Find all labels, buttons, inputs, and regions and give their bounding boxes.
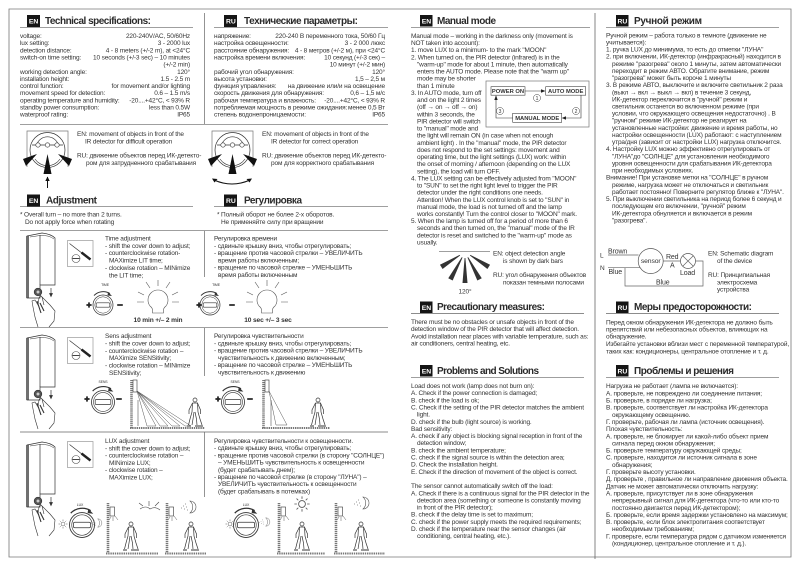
text: time adjustment EN: MAXimize LIT time; (109, 258, 163, 265)
spec values RU: 3 - 2 000 люкс (345, 40, 386, 47)
knob: lux RU (226, 503, 270, 538)
text: problems and solutions: C. Check if the setting of the PIR detector matches the ambient (411, 404, 584, 411)
heading: technical parameters: Технические параметры: (244, 16, 358, 27)
knob: lux EN: LUX (77, 503, 84, 507)
heading: adjustment RU: RU (226, 198, 236, 205)
circuit diagram: Blue (656, 280, 670, 286)
text: manual mode instructions: the onset of morning / afternoon (depending on the LUX (417, 161, 571, 168)
text: time adjustment RU: время работы включенным; (218, 256, 299, 264)
badge: RU (224, 15, 237, 27)
text: manual mode instructions: 5. When the lamp is turned off for a period of more than 6 (411, 218, 568, 225)
text: problems RU: С. проверьте, находится ли источник сигнала в зоне (606, 455, 757, 462)
text: manual mode instructions: 3. In AUTO mode, turn off (411, 90, 482, 97)
text: manual mode instructions: 4. The LUX setting can be effectively adjusted from "MOON" (411, 175, 577, 182)
text: precautions RU: Избегайте установки вблизи мест с переменной температурой, (606, 340, 789, 348)
text: manual mode instructions: NOT taken into account): (411, 40, 480, 47)
heading: adjustment RU (224, 194, 302, 206)
heading: problems and solutions: Problems and Solutions (437, 366, 539, 377)
text: manual mode instructions: seconds and then turned on, the "manual" mode of the IR (417, 225, 575, 232)
spec labels RU: напряжение: (214, 33, 251, 40)
text: manual mode instructions: Manual mode – working in the darkness only (movement is (411, 33, 574, 40)
text: problems RU: окружающему освещению. (612, 412, 691, 419)
text: precautionary measures: air conditioners, central heating, etc. (411, 341, 510, 348)
spec labels RU: высота установки: (214, 76, 267, 83)
caption: detection angle: is shown by dark bars (503, 258, 564, 265)
text: precautionary measures: Avoid installation near places with variable temperature, such as: (411, 333, 589, 340)
caption: correct operation: ром для корректного срабатывания (271, 159, 375, 167)
text: sens adjustment EN: SENSitivity; (109, 370, 142, 377)
knob: lux RU: LUX (243, 503, 250, 507)
text: manual mode RU: учитывается): (606, 39, 646, 46)
spec labels EN: installation height: (20, 76, 70, 83)
text: manual mode instructions: setting), the load will turn OFF. (417, 168, 500, 175)
text: manual mode RU: "разогрева". (612, 217, 647, 224)
panel: technical specifications EN (19, 15, 193, 119)
heading: adjustment RU: Регулировка (244, 196, 302, 206)
text: manual mode instructions: mode may be shorter (417, 76, 477, 83)
text: sens adjustment RU: Регулировка чувствительности (214, 333, 304, 340)
caption: schematic diagram: электросхема (717, 279, 758, 286)
spec labels RU: настройка времени включения: (214, 53, 305, 61)
text: time adjustment RU: Регулировка времени (214, 236, 277, 242)
text: sens adjustment RU: - вращение по часовой стрелке – УМЕНЬШИТЬ (214, 361, 352, 369)
text: lux adjustment EN: LUX adjustment (105, 438, 150, 445)
spec labels EN: voltage: (20, 33, 42, 40)
note RU: * Полный оборот не более 2-х оборотов. (217, 210, 334, 218)
text: problems RU: А. проверьте, не повреждено ли соединение питания; (606, 390, 762, 397)
text: problems and solutions: A. Check if there is a continuous signal for the PIR detector in the (411, 490, 590, 497)
flow diagram: power on, auto, manual: POWER ON (492, 89, 524, 95)
icon: screwdriver, lux (68, 442, 93, 468)
caption: schematic diagram: RU: Принципиальная (708, 272, 771, 279)
text: manual mode RU: 4. Настройку LUX можно эффективно отрегулировать от (606, 145, 770, 153)
flow diagram: power on, auto, manual: 3 (499, 109, 502, 115)
heading: technical specifications: Technical specifications: (45, 16, 151, 27)
text: precautionary measures: detection window of the PIR detector that will affect detection. (411, 326, 579, 333)
icon: PIR correct operation (208, 131, 257, 184)
badge: EN: EN (29, 19, 38, 26)
circuit diagram: Load (680, 270, 695, 277)
icon: detection angle bars: 120° (459, 288, 472, 296)
text: problems RU: В. проверьте, если блок электропитания соответствует (606, 518, 765, 526)
text: problems RU: Г. проверьте, рабочая ли лампа (источник освещения). (606, 418, 765, 426)
text: lux adjustment RU: УВЕЛИЧИТЬ чувствительность к освещенности (218, 481, 357, 488)
spec labels EN: working detection angle: (19, 69, 87, 76)
heading: precautionary measures: EN (422, 305, 431, 312)
text: problems and solutions: D. check if the bulb (light source) is working. (411, 419, 532, 426)
badge: RU (616, 15, 628, 26)
heading: precautions RU: Меры предосторожности: (634, 302, 752, 313)
panel: problems and solutions (411, 365, 590, 540)
badge: EN: EN (422, 18, 431, 25)
note RU: Не применяйте силу при вращении (221, 218, 324, 226)
text: time adjustment RU: - сдвиньте крышку вниз, чтобы отрегулировать; (214, 242, 351, 250)
text: manual mode instructions: than 1 minute (417, 83, 455, 90)
text: manual mode instructions: ambient light) . In the "manual" mode, the PIR detector (417, 140, 567, 147)
heading: precautions RU: RU (618, 305, 627, 312)
heading: adjustment EN: EN (29, 198, 38, 205)
text: problems and solutions: detection window; (417, 440, 467, 447)
text: lux adjustment RU: Регулировка чувствительности к освещенности. (214, 438, 353, 445)
text: problems RU: Нагрузка не работает (лампа не включается): (606, 382, 738, 390)
badge: EN (27, 15, 40, 27)
flow diagram: power on, auto, manual (486, 81, 589, 127)
text: sens adjustment RU: чувствительность к движению включенным; (218, 355, 346, 362)
circuit diagram: A (670, 262, 675, 270)
text: lux adjustment RU: - вращение против часовой стрелки (в сторону "СОЛНЦЕ") (214, 451, 384, 459)
bulb: 10 min (134, 280, 183, 324)
icon: PIR difficult operation (23, 131, 72, 188)
flow diagram: power on, auto, manual: 1 (536, 96, 539, 102)
text: sens adjustment EN: MAXimize SENSitivity; (109, 355, 171, 362)
text: problems RU: Б. проверьте, в порядке ли нагрузка; (606, 398, 712, 404)
text: manual mode RU: 3. В режиме АВТО, выключите и включите светильник 2 раза (606, 82, 783, 89)
caption: difficult operation: ром для затрудненного срабатывания (86, 159, 197, 167)
spec values EN: IP65 (177, 112, 191, 119)
text: manual mode RU: Ручной режим – работа только в темноте (движение не (606, 31, 767, 39)
spec values RU: 10 минут (+/-2 мин) (330, 62, 385, 69)
text: problems RU: Д. проверьте , правильное ли направление движения объекта. (606, 475, 788, 483)
text: manual mode RU: установленные настройки: движение и время работы, но (612, 124, 778, 132)
text: precautions RU: обнаружение. (606, 332, 647, 340)
knob: sens EN (84, 380, 122, 414)
spec labels RU: степень водонепроницаемости: (214, 112, 306, 119)
flow diagram: power on, auto, manual: AUTO MODE (548, 89, 583, 95)
badge: RU: RU (226, 19, 236, 26)
caption: difficult operation: RU: движение объектов перед ИК-детекто- (77, 151, 201, 159)
spec values RU: 220-240 В переменного тока, 50/60 Гц (275, 33, 385, 40)
scene: moon, lamp on (165, 501, 206, 554)
text: problems RU: Плохая чувствительность: (606, 426, 683, 433)
spec labels EN: control function: (20, 83, 64, 90)
text: problems RU: сигнала перед окном обнаружения; (612, 439, 715, 447)
text: manual mode RU: 1. ручка LUX до минимума, то есть до отметки "ЛУНА" (606, 47, 764, 54)
spec labels EN: switch-on time setting: (20, 54, 81, 61)
spec values RU: IP65 (372, 112, 386, 119)
text: lux adjustment RU: – УМЕНЬШИТЬ чувствительность к освещенности (218, 460, 365, 467)
caption: detection angle: RU: угол обнаружения объектов (493, 271, 587, 279)
flow diagram: power on, auto, manual: 2 (575, 109, 578, 115)
panel: precautionary measures (411, 302, 589, 348)
bulb: 10 sec: 10 sec +/– 3 sec (244, 317, 292, 324)
text: problems RU: (кондиционер, центральное отопление и т. д.). (612, 540, 746, 548)
caption: detection angle: EN: object detection angle (493, 250, 566, 258)
spec values EN: (+/-2 min) (163, 62, 190, 69)
text: time adjustment EN: - counterclockwise rotation- (105, 250, 180, 257)
spec values RU: 10 секунд (+/-3 сек) – (324, 54, 386, 61)
text: manual mode RU: настройки освещенности (LUX) работают: с наступлением (612, 131, 782, 139)
text: manual mode RU: ИК-детектора обнуляется и включается в режим (612, 209, 753, 217)
text: problems and solutions: Load does not work (lamp does not burn on): (411, 383, 535, 390)
text: manual mode RU: 5. При выключении светильника на период более 6 секунд и (606, 195, 782, 203)
spec values RU: на движение или/и на освещение (288, 83, 386, 90)
panel: precautions RU (606, 302, 789, 355)
spec values EN: for movement and/or lighting (112, 83, 191, 90)
spec labels EN: lux setting: (20, 40, 50, 47)
knob: sens RU: SENS (231, 380, 240, 384)
spec values EN: 120° (177, 68, 191, 76)
panel: technical specifications RU (214, 15, 388, 119)
text: problems and solutions: B. check the ambient temperature; (411, 447, 506, 454)
text: manual mode instructions: manual mode, the load is not turned off and the lamp (417, 204, 562, 211)
heading: problems RU: Проблемы и решения (634, 365, 734, 377)
spec values RU: -20....+42°C, < 93% R (324, 96, 385, 104)
text: problems and solutions: C. check if the power supply meets the required requirements; (411, 519, 582, 526)
text: problems and solutions: E. Check if the direction of movement of the object is correct. (411, 469, 578, 476)
text: problems and solutions: B. check if the load is ok; (411, 397, 479, 404)
text: problems RU: обнаружения; (612, 461, 653, 469)
text: manual mode instructions: detector under the right conditions one needs. (417, 190, 543, 197)
text: problems and solutions: in front of the PIR detector); (417, 505, 493, 512)
spec labels RU: функция управления: (214, 83, 277, 90)
heading: problems RU: RU (618, 368, 627, 376)
circuit diagram: N (600, 265, 605, 272)
icon: screwdriver, time (68, 240, 93, 266)
spec values EN: -20....+42°C, < 93% R (129, 96, 190, 104)
icon: lamp with hand, lux (27, 442, 55, 536)
caption: correct operation: EN: movement of objects in front of the (262, 131, 369, 138)
text: manual mode instructions: (off → on → off → on) (417, 104, 477, 111)
text: precautions RU: таких как: кондиционеры, центральное отопление и т. д. (606, 348, 769, 355)
text: lux adjustment EN: - clockwise rotation – (105, 467, 163, 474)
panel: manual mode EN (411, 15, 590, 246)
caption: correct operation: RU: движение объектов перед ИК-детекто- (262, 151, 386, 159)
text: problems and solutions: A. check if any object is blocking signal reception in front of the (411, 433, 583, 440)
text: manual mode RU: уровня освещенности для срабатывания ИК-детектора (612, 159, 772, 167)
text: problems RU: Г. проверьте, если температура рядом с датчиком изменяется (606, 533, 787, 540)
text: problems and solutions: B. check if the delay time is set to maximum; (411, 512, 533, 519)
knob: time RU: TIME (212, 283, 221, 287)
caption: schematic diagram: устройства (717, 286, 750, 294)
icon: lamp with hand, sens (27, 335, 55, 429)
flow diagram: power on, auto, manual: MANUAL MODE (515, 116, 559, 122)
text: time adjustment EN: - clockwise rotation – MINimize (105, 265, 191, 272)
text: manual mode RU: режиме "разогрева" около 1 минуты, затем автоматически (612, 61, 782, 68)
spec values EN: 0.6 – 1.5 m/s (154, 90, 191, 97)
text: manual mode RU: светильник останется во включенном режиме (при (612, 104, 759, 110)
text: problems and solutions: D. Check the installation height. (411, 462, 498, 469)
spec values EN: 220-240V/AC, 50/60Hz (126, 33, 190, 40)
spec values EN: 3 - 2000 lux (158, 40, 191, 47)
knob: time EN: TIME (101, 283, 110, 287)
text: lux adjustment RU: - вращение по часовой стрелке (в сторону "ЛУНА") – (214, 473, 367, 481)
circuit diagram: Blue (608, 269, 622, 276)
spec labels RU: рабочий угол обнаружения: (214, 68, 294, 76)
text: manual mode RU: (выкл → вкл → выкл → вкл) в течение 3 секунд, (612, 89, 751, 96)
text: sens adjustment EN: - clockwise rotation – MINimize (105, 363, 191, 370)
spec values RU: 0,6 – 1,5 м/с (350, 90, 386, 97)
text: manual mode RU: режиме, нагрузка может не отключаться и светильник (612, 182, 768, 189)
text: lux adjustment RU: (будет срабатывать в потемках) (218, 487, 310, 495)
heading: manual mode RU: Ручной режим (634, 16, 702, 27)
bulb: 10 sec (244, 280, 292, 324)
column divider (594, 13, 596, 559)
text: precautionary measures: There must be no obstacles or unsafe objects in front of the (411, 319, 574, 326)
text: manual mode instructions: Attention! When the LUX control knob is set to "SUN" in (417, 197, 570, 204)
text: time adjustment RU: - вращение против часовой стрелки – УВЕЛИЧИТЬ (214, 249, 362, 257)
text: lux adjustment EN: MAXimize LUX; (109, 474, 153, 482)
text: lux adjustment EN: - shift the cover down to adjust; (105, 445, 191, 452)
text: manual mode RU: "ручном" режиме ИК-детектор не реагирует на (612, 118, 747, 125)
scene: moon, lamp on, RU (334, 497, 385, 554)
text: problems RU: А. проверьте, присутствует ли в зоне обнаружения (606, 489, 753, 497)
text: manual mode RU: работает постоянно! Поверните регулятор ближе к "ЛУНА". (612, 188, 784, 196)
caption: difficult operation: IR detector for difficult operation (85, 138, 173, 145)
badge: EN (420, 15, 432, 26)
spec values EN: 1.5 - 2.5 m (160, 76, 190, 83)
text: manual mode instructions: 2. When turned on, the PIR detector (infrared) is in the (411, 54, 560, 61)
text: problems RU: Датчик не может автоматически отключить нагрузку: (606, 483, 758, 490)
scene: sunset, lamp off (106, 501, 160, 554)
text: sens adjustment EN: Sens adjustment (105, 333, 152, 340)
text: sens adjustment RU: - сдвиньте крышку вниз, чтобы отрегулировать; (214, 339, 351, 347)
text: sens adjustment RU: чувствительность к движению (218, 369, 306, 376)
text: manual mode instructions: to "manual" mode and (417, 126, 479, 133)
text: problems RU: Г. проверьте высоту установки. (606, 469, 696, 476)
spec labels RU: скорость движения для обнаружения: (214, 89, 324, 97)
text: manual mode instructions: "warm-up" mode for about 1 minute, then automatically (417, 61, 569, 68)
text: problems RU: В. проверьте, соответствует ли настройка ИК-детектора (606, 404, 768, 412)
text: problems and solutions: C. check if the signal source is within the detection area; (411, 454, 565, 462)
spec values RU: менее 0,5 Вт (348, 105, 385, 112)
heading: adjustment EN (27, 194, 98, 206)
text: lux adjustment EN: - counterclockwise rotation – (105, 453, 184, 460)
text: time adjustment EN: Time adjustment (105, 236, 151, 242)
text: time adjustment RU: - вращение по часовой стрелке – УМЕНЬШИТЬ (214, 264, 352, 272)
circuit diagram: L (600, 252, 604, 260)
text: manual mode instructions: usually. (417, 239, 438, 246)
spec values EN: 10 seconds (+/-3 sec) – 10 minutes (93, 54, 191, 61)
heading: problems and solutions: EN (422, 368, 431, 376)
text: time adjustment EN: - shift the cover down to adjust; (105, 243, 191, 250)
spec labels EN: detection distance: (20, 47, 72, 54)
caption: schematic diagram: of the device (717, 258, 753, 265)
text: problems and solutions: conditioning, central heating, etc.). (417, 533, 511, 540)
text: sens adjustment RU: - вращение против часовой стрелки – УВЕЛИЧИТЬ (214, 346, 362, 354)
text: manual mode instructions: PIR detector will switch (417, 118, 481, 125)
text: problems and solutions: The sensor cannot automatically switch off the load: (411, 483, 553, 490)
caption: correct operation: IR detector for correct operation (271, 138, 359, 145)
spec labels EN: waterproof rating: (19, 112, 68, 119)
badge: RU: RU (618, 18, 627, 25)
text: problems and solutions: light. (417, 412, 430, 419)
bulb: 10 min: 10 min +/– 2 min (134, 317, 183, 324)
text: time adjustment EN: the LIT time; (109, 272, 144, 279)
text: manual mode instructions: to "SUN" to set the right light level to trigger the PIR (417, 183, 558, 190)
text: precautions RU: Перед окном обнаружения ИК-детектора не должно быть (606, 318, 773, 326)
text: manual mode RU: "разогрева" может быть короче 1 минуты (612, 74, 731, 82)
text: manual mode RU: при необходимых условиях. (612, 167, 694, 175)
text: precautions RU: препятствий или небезопасных объектов, влияющих на (606, 326, 768, 334)
knob: sens EN: SENS (99, 380, 108, 384)
knob: time EN (86, 283, 123, 315)
text: manual mode instructions: detector is reset and switched to the "warm-up" mode as (417, 232, 573, 239)
spec labels RU: расстояние обнаружения: (214, 46, 289, 54)
text: problems and solutions: A. Check if the power connection is damaged; (411, 390, 537, 397)
text: manual mode instructions: operating time, but the light settings (LUX) work: within (417, 154, 567, 161)
room diagram: high sensitivity (130, 380, 205, 429)
circuit diagram: sensor (641, 258, 661, 265)
text: manual mode RU: переходит в режим АВТО. Обратите внимание, режим (612, 67, 770, 75)
text: lux adjustment RU: (будет срабатывать днем); (218, 466, 295, 474)
note EN: * Overall turn – no more than 2 turns. (20, 212, 122, 218)
spec values RU: 120° (372, 68, 386, 76)
spec labels EN: standby power consumption: (20, 105, 99, 112)
text: manual mode instructions: and on the light 2 times (417, 97, 482, 104)
spec values RU: 1,5 – 2,5 м (355, 76, 386, 83)
text: manual mode RU: 2. при включении, ИК-детектор (инфракрасный) находится в (606, 53, 782, 61)
text: lux adjustment RU: - сдвиньте крышку вниз, чтобы отрегулировать; (214, 444, 351, 452)
note EN: Do not apply force when rotating (25, 219, 115, 226)
text: problems RU: А. проверьте, не блокирует ли какой-либо объект прием (606, 432, 769, 440)
caption: difficult operation: EN: movement of objects in front of the (77, 131, 184, 138)
circuit diagram: Red (666, 254, 679, 261)
scene: sun, lamp off (277, 496, 325, 554)
text: manual mode instructions: 1. move LUX to a minimum- to the mark "MOON" (411, 47, 547, 54)
icon: screwdriver, sens (68, 338, 93, 364)
circuit diagram: Brown (608, 248, 627, 256)
spec labels EN: movement speed for detection: (20, 90, 106, 97)
circuit diagram (600, 248, 703, 286)
spec values EN: less than 0.5W (149, 105, 191, 112)
icon: lamp with hand, time (27, 233, 55, 327)
heading: adjustment EN: Adjustment (46, 196, 98, 206)
spec labels RU: потребляемая мощность в режиме ожидания: (214, 104, 347, 112)
caption: detection angle: показан темными полосами (503, 279, 584, 286)
text: sens adjustment EN: - counterclockwise rotation – (105, 348, 184, 355)
spec labels RU: рабочая температура и влажность: (214, 96, 316, 104)
text: problems RU: постоянно двигается перед ИК-детектором); (612, 505, 740, 512)
text: manual mode RU: последующем его включении, "ручной" режим (612, 202, 746, 210)
text: manual mode RU: "ЛУНА"до "СОЛНЦЕ" для установления необходимого (612, 152, 770, 160)
text: lux adjustment EN: MINimize LUX; (109, 460, 151, 467)
knob: time RU (196, 283, 235, 315)
heading: precautionary measures: Precautionary measures: (437, 302, 545, 313)
spec labels EN: operating temperature and humidity: (20, 97, 120, 104)
text: manual mode RU: Внимание! При установке метки на "СОЛНЦЕ" в ручном (606, 175, 769, 182)
panel: problems RU (606, 365, 788, 548)
text: problems RU: непрерывный сигнал для ИК-детектора (что-то или кто-то (612, 497, 780, 505)
text: manual mode instructions: works constantly! Turn the control closer to "MOON" mark. (416, 211, 577, 218)
text: sens adjustment EN: - shift the cover down to adjust; (105, 340, 191, 347)
text: problems and solutions: D. check if the temperature near the sensor changes (air (411, 526, 567, 533)
text: manual mode RU: ИК-детектор переключится в "ручной" режим и (612, 95, 748, 103)
spec values RU: 4 - 8 метров (+/-2 м), при <24°C (295, 46, 385, 54)
text: problems and solutions: detection area (something or someone is constantly moving (417, 497, 581, 504)
text: manual mode instructions: within 3 seconds, the (416, 111, 475, 118)
knob: lux EN (58, 503, 102, 538)
text: manual mode instructions: the light will remain ON (in case when not enough (417, 133, 554, 140)
spec labels RU: настройка освещенности: (214, 39, 289, 47)
text: manual mode instructions: does not respond to the set settings: movement and (417, 147, 560, 154)
text: manual mode instructions: enters the AUTO mode. Please note that the "warm up" (417, 69, 570, 76)
text: time adjustment RU: время работы включенным (218, 271, 298, 279)
icon: detection angle bars (439, 252, 490, 296)
heading: manual mode: Manual mode (437, 16, 496, 27)
text: problems and solutions: Bad sensitivity: (411, 426, 452, 433)
spec values EN: 4 - 8 meters (+/-2 m), at <24°C (106, 46, 190, 54)
caption: schematic diagram: EN: Schematic diagram (708, 250, 773, 258)
text: problems RU: необходимым требованиям; (612, 525, 694, 533)
knob: sens RU (215, 380, 253, 414)
text: problems RU: Б. проверьте температуру окружающей среды; (606, 447, 742, 455)
text: manual mode RU: условии, что окружающего освещения недостаточно) . В (612, 111, 776, 118)
room diagram: low sensitivity (262, 380, 330, 429)
panel: manual mode RU (606, 15, 784, 224)
text: problems RU: Б. проверьте, если время задержки установлено на максимум; (606, 512, 788, 519)
text: manual mode RU: утра/дня (зависит от настройки LUX) нагрузка отключится. (612, 138, 782, 146)
